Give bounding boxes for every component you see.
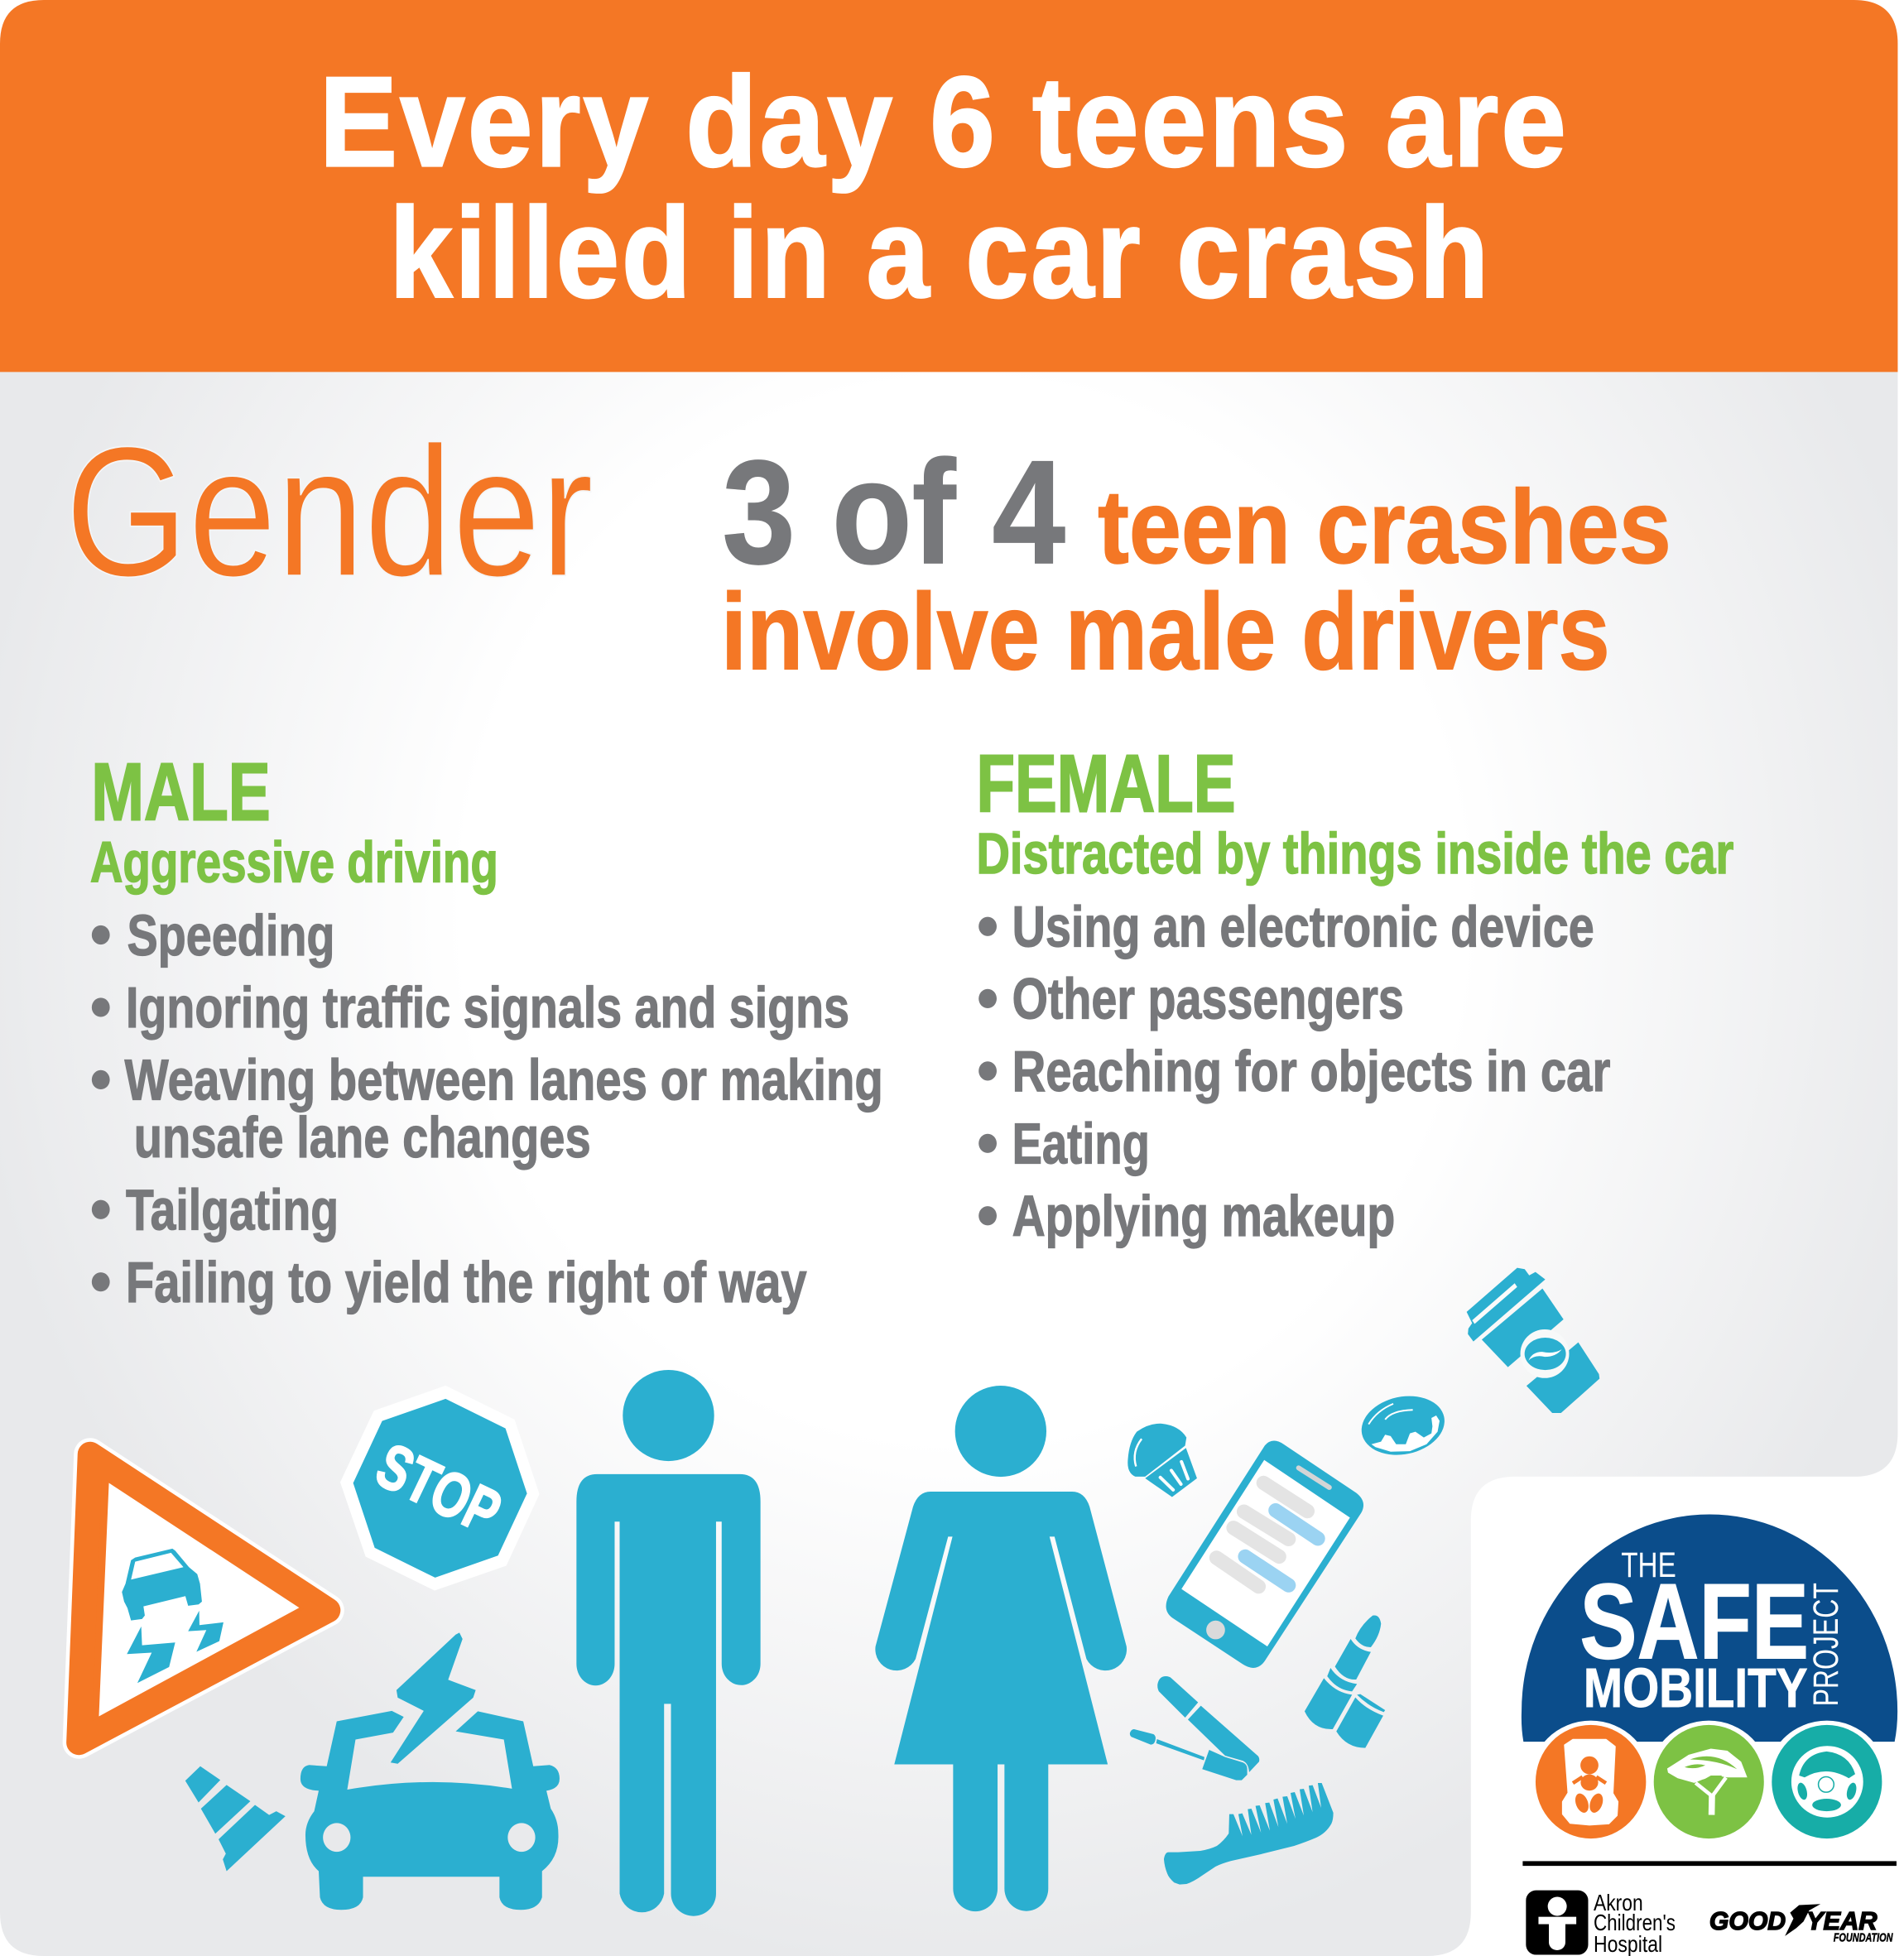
panel: male list xyxy=(90,747,883,1314)
male subheading: Aggressive driving xyxy=(90,830,498,895)
message bubbles xyxy=(1217,1483,1318,1587)
logo: Akron Children's Hospital: Children's xyxy=(1594,1910,1676,1935)
female bullets xyxy=(978,917,997,1225)
statistic headline: involve male drivers xyxy=(721,570,1610,692)
logo wordmark: SAFE xyxy=(1579,1561,1809,1681)
title: Every day 6 teens are xyxy=(320,50,1569,194)
icon: donut xyxy=(1356,1389,1450,1463)
male items xyxy=(124,903,883,1314)
female subheading: Distracted by things inside the car xyxy=(976,821,1733,886)
icon: bike helmet xyxy=(1647,1721,1770,1843)
male items: Ignoring traffic signals and signs xyxy=(126,975,849,1040)
male items: unsafe lane changes xyxy=(134,1105,591,1170)
female items: Other passengers xyxy=(1012,967,1404,1031)
icon: slippery road warning sign xyxy=(79,1454,328,1742)
logo: Akron Children's Hospital xyxy=(1526,1890,1676,1956)
female items: Reaching for objects in car xyxy=(1012,1039,1610,1103)
logo: Goodyear Foundation: GOOD xyxy=(1709,1908,1786,1935)
header banner xyxy=(0,0,1897,372)
logo: Akron Children's Hospital: Akron xyxy=(1594,1890,1643,1915)
icon: female figure xyxy=(875,1386,1127,1911)
title: killed in a car crash xyxy=(389,180,1491,324)
male items: Speeding xyxy=(127,903,335,968)
female items: Applying makeup xyxy=(1012,1184,1395,1248)
icon: coffee cup xyxy=(1467,1268,1599,1413)
male items: Weaving between lanes or making xyxy=(124,1048,883,1113)
icon: cupcake xyxy=(1127,1424,1197,1497)
logo: The Safe Mobility Project xyxy=(1522,1515,1897,1843)
male items: Tailgating xyxy=(126,1177,339,1242)
icon: traffic cone xyxy=(185,1766,286,1871)
icon: smartphone xyxy=(1166,1441,1363,1668)
icon: child car seat xyxy=(1530,1721,1652,1843)
icon: lipstick xyxy=(1305,1615,1385,1748)
icon: mascara xyxy=(1130,1676,1259,1781)
logo wordmark: MOBILITY xyxy=(1584,1657,1808,1719)
male heading: MALE xyxy=(91,747,271,838)
logo wordmark xyxy=(1579,1545,1845,1719)
heading: Gender: Gender xyxy=(65,409,594,615)
female items: Using an electronic device xyxy=(1012,894,1594,959)
logo wordmark: PROJECT xyxy=(1806,1583,1845,1706)
male items: Failing to yield the right of way xyxy=(126,1250,807,1314)
icon: crashed car xyxy=(301,1632,560,1910)
icon: male figure xyxy=(576,1370,761,1916)
statistic headline xyxy=(721,430,1671,692)
divider rule xyxy=(1522,1861,1897,1866)
logo: Goodyear Foundation xyxy=(1709,1904,1893,1945)
icon: stop sign: STOP xyxy=(366,1430,512,1549)
logo dome xyxy=(1522,1515,1897,1742)
icon: steering wheel xyxy=(1766,1721,1888,1843)
logo wordmark: THE xyxy=(1621,1545,1676,1584)
female items: Eating xyxy=(1012,1112,1150,1175)
logo: Goodyear Foundation: YEAR xyxy=(1806,1908,1878,1935)
icon: comb xyxy=(1164,1783,1334,1885)
statistic headline: teen crashes xyxy=(1098,468,1671,585)
female heading: FEMALE xyxy=(976,738,1236,829)
title xyxy=(320,50,1569,324)
statistic headline: 3 of 4 xyxy=(723,430,1065,594)
panel: female list xyxy=(976,738,1733,1248)
female items xyxy=(1012,894,1610,1248)
male bullets xyxy=(92,925,110,1291)
icon: stop sign xyxy=(340,1386,540,1591)
